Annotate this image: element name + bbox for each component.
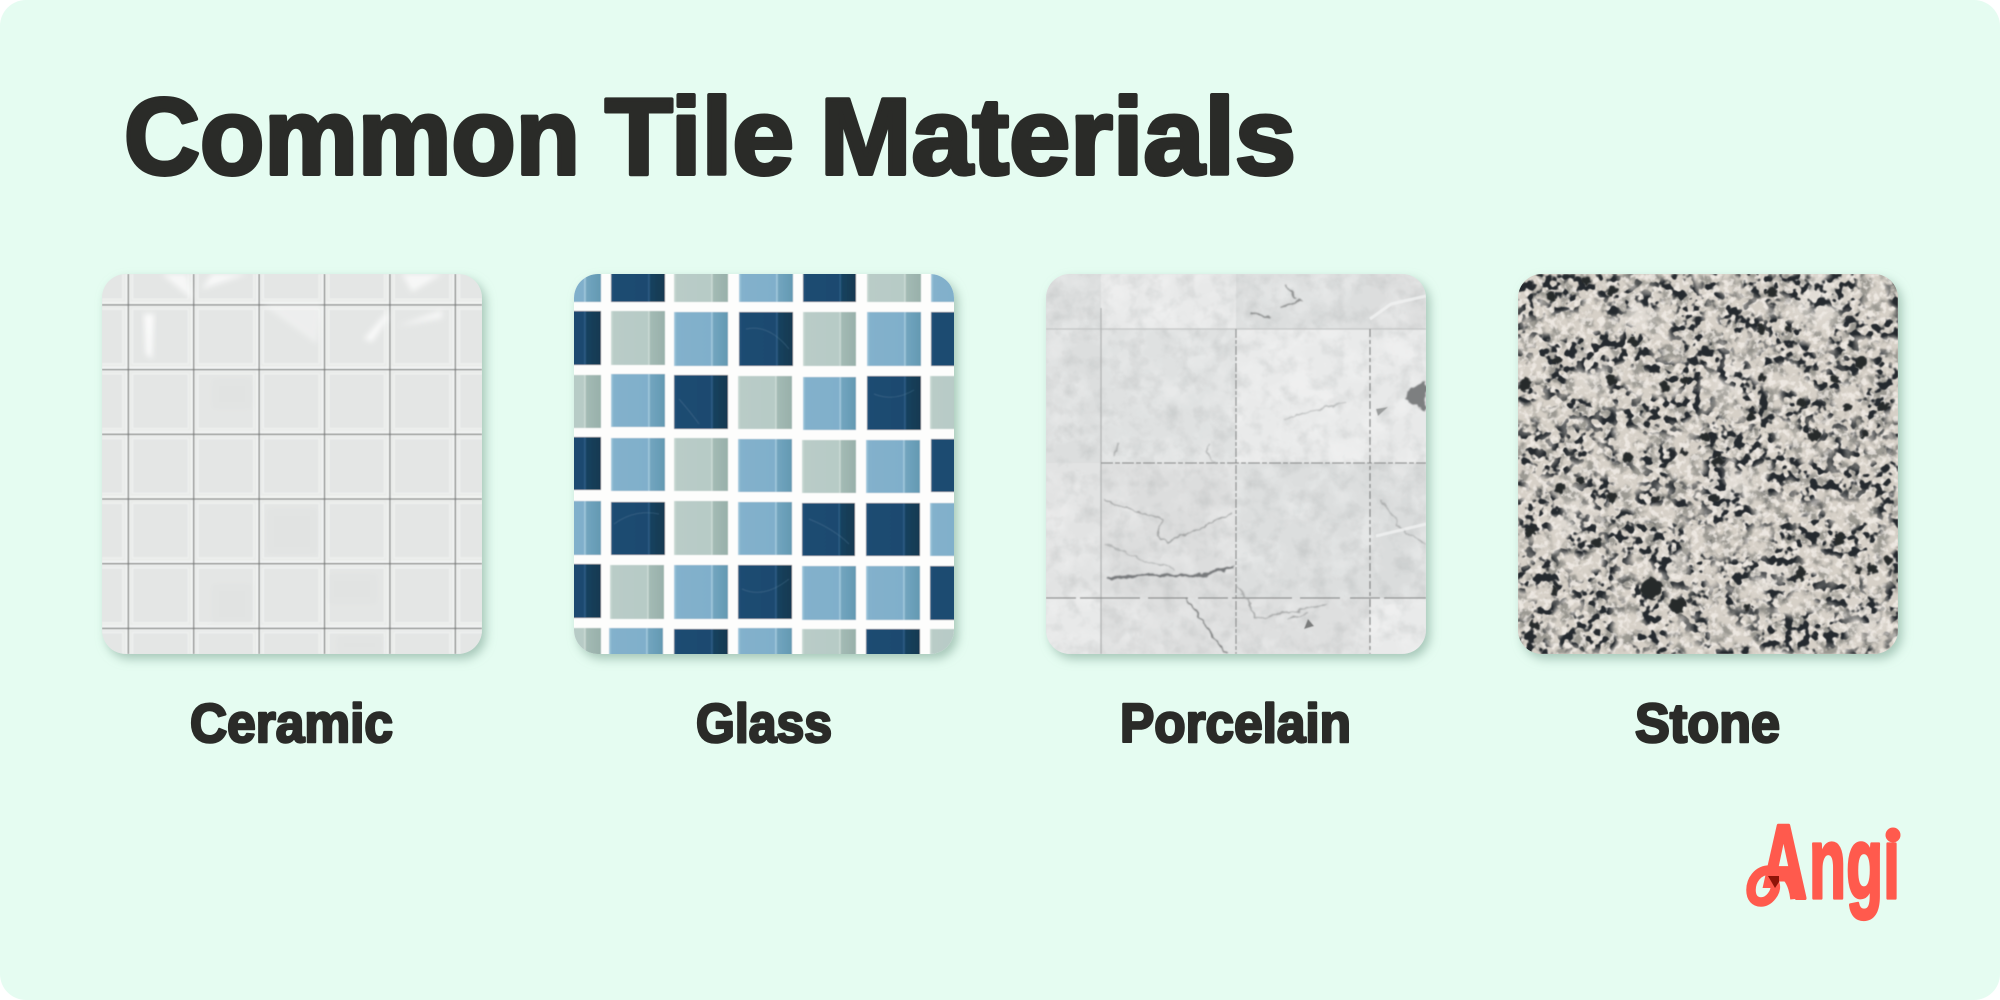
panel: porcelain tile image [1046, 274, 1426, 654]
label: ceramic: Ceramic [190, 692, 393, 754]
logo: Angi: A [1760, 804, 1807, 921]
label: stone: Stone [1635, 692, 1780, 754]
panel: stone tile image [1518, 274, 1898, 654]
logo: Angi: ngi [1809, 806, 1900, 920]
label: porcelain: Porcelain [1120, 692, 1351, 754]
label: glass: Glass [696, 692, 832, 754]
panel: ceramic tile image [102, 274, 482, 654]
title [124, 76, 1296, 198]
logo: Angi [1751, 804, 1904, 921]
title: Tile [605, 76, 794, 198]
panel: glass tile image [572, 274, 964, 664]
title: Materials [820, 76, 1296, 198]
title: Common [124, 76, 580, 198]
